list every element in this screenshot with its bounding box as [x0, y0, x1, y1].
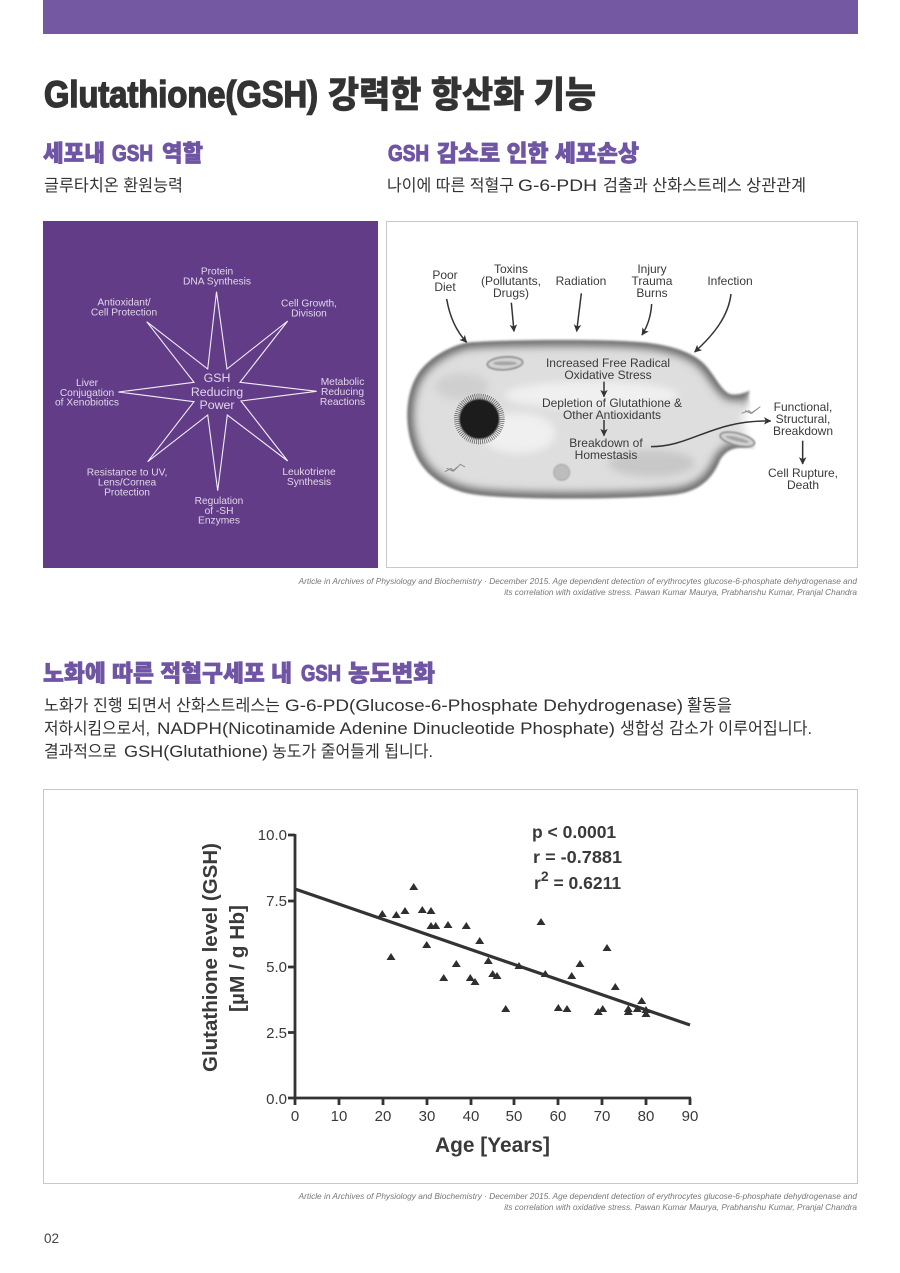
label: functional breakdown: Structural,: [776, 412, 830, 426]
x tick labels: 60: [550, 1108, 566, 1125]
x tick labels: 30: [419, 1108, 435, 1125]
label: injury: Burns: [636, 286, 668, 300]
statistics: 2: [541, 868, 549, 884]
subheading: G-6-PDH and oxidative stress: 나이에 따른 적혈구: [387, 176, 514, 195]
body paragraph: G-6-PD(Glucose-6-Phosphate Dehydrogenase): [285, 697, 683, 715]
label: toxins: Toxins: [494, 262, 528, 276]
x tick labels: 50: [506, 1108, 522, 1125]
body paragraph: 활동을: [687, 696, 732, 715]
label: functional breakdown: Functional,: [774, 400, 832, 414]
label: cell growth: Division: [291, 308, 327, 320]
label: liver conjugation: Liver: [76, 378, 99, 389]
x tick labels: 70: [594, 1108, 610, 1125]
y tick labels: 10.0: [258, 827, 287, 844]
label: radiation: Radiation: [556, 274, 606, 288]
body paragraph: NADPH(Nicotinamide Adenine Dinucleotide Phosphate): [157, 720, 615, 738]
label: resistance to UV: Resistance to UV,: [87, 468, 167, 478]
label: leukotriene synthesis: Synthesis: [287, 477, 331, 488]
vesicle: [554, 464, 570, 480]
x tick labels: 40: [463, 1108, 479, 1125]
label: toxins: (Pollutants,: [481, 274, 541, 288]
regression line: [295, 889, 690, 1025]
label: free radical stress: Increased Free Radical: [546, 356, 670, 370]
citation: top: Article in Archives of Physiology and Biochemistry · December 2015. Age dependent detection of erythrocytes glucose-6-phosphate dehydrogenase and: [298, 576, 857, 586]
label: injury: Injury: [637, 262, 667, 276]
heading: role of GSH in cells: [43, 140, 203, 166]
label: injury: Trauma: [632, 274, 673, 288]
heading: GSH concentration change with aging: 농도변화: [348, 660, 435, 686]
cell illustration: [406, 338, 760, 500]
label: functional breakdown: Breakdown: [773, 424, 833, 438]
label: regulation of enzymes: Regulation: [195, 496, 243, 507]
label: homeostasis breakdown: Homestasis: [575, 448, 637, 462]
label: antioxidant: Antioxidant/: [97, 298, 151, 308]
label: liver conjugation: Conjugation: [60, 388, 114, 399]
y tick labels: 2.5: [266, 1025, 287, 1042]
label: metabolic reactions: Metabolic: [321, 377, 364, 388]
body paragraph: GSH(Glutathione): [124, 743, 268, 761]
label: glutathione depletion: Other Antioxidants: [563, 408, 661, 422]
panel: cell damage diagram: [386, 222, 858, 568]
label: cell rupture: Cell Rupture,: [768, 466, 838, 480]
label: metabolic reactions: Reducing: [321, 387, 364, 398]
label: regulation of enzymes: of -SH: [205, 506, 233, 517]
label: leukotriene synthesis: Leukotriene: [282, 467, 336, 478]
heading: role of GSH in cells: 세포내: [43, 140, 105, 166]
x tick labels: 10: [331, 1108, 347, 1125]
label: liver conjugation: of Xenobiotics: [55, 398, 119, 408]
panel: GSH reducing power star: [43, 221, 378, 568]
heading: GSH concentration change with aging: 노화에 따른 적혈구세포 내: [43, 660, 292, 686]
title: [44, 74, 596, 115]
heading: role of GSH in cells: 역할: [162, 140, 203, 166]
citation: bottom: its correlation with oxidative stress. Pawan Kumar Maurya, Prabhanshu Kumar, Pranjal Chandra: [504, 1202, 857, 1212]
label: glutathione depletion: Depletion of Glutathione &: [542, 396, 682, 410]
page number: 02: [44, 1231, 59, 1246]
title: Glutathione(GSH): [44, 74, 318, 115]
x tick labels: 20: [375, 1108, 391, 1125]
axes: [288, 834, 691, 1105]
statistics: r = -0.7881: [533, 847, 622, 867]
heading: GSH concentration change with aging: [43, 660, 435, 686]
label: poor diet: Diet: [434, 280, 456, 294]
nucleus: [457, 396, 502, 442]
y tick labels: 7.5: [266, 893, 287, 910]
x tick labels: 80: [638, 1108, 654, 1125]
y axis units: [µM / g Hb]: [227, 905, 249, 1012]
subheading: G-6-PDH and oxidative stress: G-6-PDH: [518, 177, 597, 195]
subheading: G-6-PDH and oxidative stress: 검출과 산화스트레스 상관관계: [603, 176, 806, 195]
mitochondrion lower: [719, 429, 756, 449]
body paragraph: [44, 696, 812, 761]
label: homeostasis breakdown: Breakdown of: [569, 436, 643, 450]
body paragraph: 농도가 줄어들게 됩니다.: [272, 742, 433, 761]
statistics: p < 0.0001: [532, 822, 616, 842]
body paragraph: 저하시킴으로서,: [44, 719, 150, 738]
body paragraph: 생합성 감소가 이루어집니다.: [620, 719, 812, 738]
heading: role of GSH in cells: GSH: [112, 140, 153, 166]
x tick labels: 0: [291, 1108, 299, 1125]
top banner: [43, 0, 858, 34]
panel: scatter chart: [44, 790, 858, 1184]
star center label: Reducing: [191, 385, 243, 399]
heading: cell damage from GSH decrease: GSH: [388, 140, 429, 166]
heading: cell damage from GSH decrease: 감소로 인한 세포손상: [437, 140, 639, 166]
y axis title: Glutathione level (GSH): [200, 843, 222, 1072]
mitochondrion upper: [487, 356, 523, 371]
arrows: [447, 293, 803, 464]
label: resistance to UV: Protection: [104, 488, 150, 498]
subheading: glutathione reducing power: 글루타치온 환원능력: [44, 176, 183, 195]
heading: GSH concentration change with aging: GSH: [301, 660, 341, 686]
subheading: G-6-PDH and oxidative stress: [387, 176, 806, 195]
right end fade: [743, 390, 771, 453]
title: 강력한 항산화 기능: [328, 74, 596, 115]
data points: [378, 883, 650, 1017]
organelle fragments: [445, 407, 760, 472]
citation: top: its correlation with oxidative stress. Pawan Kumar Maurya, Prabhanshu Kumar, Pranjal Chandra: [504, 587, 857, 597]
label: protein synthesis: Protein: [201, 266, 233, 278]
y tick labels: 0.0: [266, 1091, 287, 1108]
body paragraph: 노화가 진행 되면서 산화스트레스는: [44, 696, 280, 715]
x axis title: Age [Years]: [435, 1134, 550, 1157]
label: antioxidant: Cell Protection: [91, 308, 157, 318]
star center label: Power: [199, 398, 235, 412]
label: resistance to UV: Lens/Cornea: [98, 478, 156, 488]
statistics: = 0.6211: [549, 873, 621, 893]
label: protein synthesis: DNA Synthesis: [183, 276, 251, 288]
label: infection: Infection: [707, 274, 753, 288]
star outline: [118, 292, 317, 491]
label: toxins: Drugs): [493, 286, 529, 300]
label: free radical stress: Oxidative Stress: [564, 368, 652, 382]
statistics: r: [534, 873, 541, 893]
x tick labels: 90: [682, 1108, 698, 1125]
label: cell rupture: Death: [787, 478, 819, 492]
body paragraph: 결과적으로: [44, 742, 117, 761]
label: regulation of enzymes: Enzymes: [198, 516, 240, 526]
label: metabolic reactions: Reactions: [320, 397, 365, 408]
star center label: GSH: [204, 371, 230, 385]
y tick labels: 5.0: [266, 959, 287, 976]
label: poor diet: Poor: [432, 268, 458, 282]
citation: bottom: Article in Archives of Physiology and Biochemistry · December 2015. Age dependent detection of erythrocytes glucose-6-phosphate dehydrogenase and: [298, 1191, 857, 1201]
label: cell growth: Cell Growth,: [281, 298, 337, 310]
